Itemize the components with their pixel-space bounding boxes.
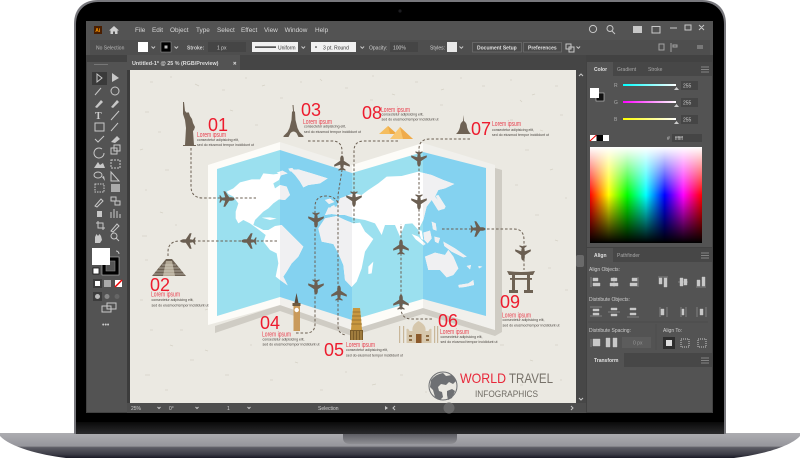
panel: color [587, 62, 712, 247]
control bar: Opacity: [369, 46, 387, 52]
03 text block: consectetur adipisicing elit, [304, 124, 346, 128]
logo: world travel infographics: INFOGRAPHICS [475, 389, 538, 399]
control bar [90, 40, 710, 55]
canvas scrollbar [576, 74, 584, 400]
09 text block: consectetur adipisicing elit, [502, 318, 544, 322]
02 text block: Lorem ipsum [151, 292, 180, 298]
panel: align [587, 248, 712, 353]
icon: eiffel tower [284, 105, 304, 137]
control bar: 3 pt. Round [323, 46, 349, 52]
menu bar [94, 25, 704, 34]
01 text block: 01 [208, 115, 228, 135]
panel: color: B [614, 117, 618, 123]
continents [227, 168, 482, 288]
08 text block: Lorem ipsum [381, 107, 410, 114]
panel: align: Pathfinder [617, 253, 640, 259]
01 text block [197, 115, 254, 147]
05 text block: consectetur adipisicing elit, [346, 348, 388, 352]
document tab: Untitled-1* @ 25 % (RGB/Preview) [132, 61, 219, 67]
status bar: 1 [227, 406, 230, 412]
06 text block [438, 311, 498, 344]
09 text block [500, 292, 560, 328]
folded world map [208, 142, 502, 336]
panel: align: Align To: [663, 328, 682, 334]
05 text block: sed do eiusmod tempor incididunt ut [346, 354, 403, 358]
logo: world travel infographics: WORLD [460, 370, 506, 386]
tools panel: T [95, 111, 102, 122]
02 text block [150, 275, 208, 308]
04 text block: sed do eiusmod tempor incididunt ut [262, 342, 320, 346]
panel: align: 0 px [633, 340, 643, 346]
panel: transform [587, 353, 712, 412]
control bar: Preferences [528, 46, 557, 52]
icon: temple stupa [456, 115, 471, 134]
06 text block: consectetur adipisicing elit, [440, 335, 482, 339]
menu bar: View [264, 27, 278, 34]
status bar: 0° [169, 406, 174, 412]
map paper frame [208, 142, 495, 330]
control bar: 1 px [217, 46, 227, 52]
map shadow [215, 168, 502, 336]
tools panel [87, 62, 127, 412]
08 text block: 08 [362, 103, 382, 123]
control bar: No Selection [96, 46, 125, 52]
panel: color: Color [594, 67, 607, 73]
01 text block: consectetur adipisicing elit, [197, 138, 239, 142]
dashed routes [168, 139, 524, 335]
05 text block [324, 340, 403, 360]
02 text block: sed do eiusmod tempor incididunt ut [152, 304, 208, 308]
panel: color: G [614, 100, 618, 106]
tools panel: ••• [102, 322, 110, 329]
08 text block [362, 103, 438, 123]
menu bar: Help [315, 27, 329, 34]
01 text block: sed do eiusmod tempor incididunt ut [197, 143, 254, 147]
menu bar: Object [170, 27, 189, 34]
panel: align: Distribute Objects: [589, 297, 630, 303]
status bar [127, 402, 586, 414]
09 text block: 09 [500, 292, 520, 312]
panel: color: Gradient [617, 67, 637, 73]
04 text block: Lorem ipsum [262, 332, 291, 338]
control bar: Document Setup [477, 46, 517, 52]
icon: mayan pyramid [152, 259, 186, 276]
panel: color: # [667, 136, 670, 142]
control bar: 100% [393, 46, 406, 52]
menu bar: File [135, 27, 146, 34]
09 text block: sed do eiusmod tempor incididunt ut [502, 324, 560, 328]
airplanes [180, 151, 531, 310]
menu bar: Effect [241, 27, 257, 34]
06 text block: sed do eiusmod tempor incididunt ut [440, 340, 498, 344]
04 text block [260, 313, 320, 346]
status bar: 25% [131, 406, 142, 412]
map water panels [217, 150, 486, 320]
menu bar: Type [196, 27, 210, 34]
icon: big ben [292, 293, 300, 331]
06 text block: Lorem ipsum [440, 329, 469, 336]
04 text block: consectetur adipisicing elit, [262, 338, 304, 342]
menu bar: Select [217, 27, 235, 34]
control bar: Stroke: [187, 46, 205, 52]
icon: taj mahal [399, 321, 438, 343]
panel: color: 255 [683, 84, 692, 90]
07 text block: sed do eiusmod tempor incididunt ut [492, 133, 549, 137]
color spectrum [590, 147, 702, 243]
03 text block: 03 [301, 100, 321, 120]
panel: align: Align Objects: [589, 267, 620, 273]
panel: align: Align [594, 253, 606, 259]
07 text block [471, 119, 549, 139]
illustrator window [86, 21, 713, 413]
02 text block: 02 [150, 275, 170, 295]
07 text block: Lorem ipsum [492, 121, 521, 128]
laptop base [0, 433, 800, 458]
panel: color: Stroke [648, 67, 663, 73]
06 text block: 06 [438, 311, 458, 331]
panel: color: 255 [683, 100, 692, 106]
09 text block: Lorem ipsum [502, 312, 531, 320]
menu bar: Window [285, 27, 308, 34]
04 text block: 04 [260, 313, 280, 333]
panel: color: R [614, 83, 618, 89]
logo: world travel infographics: TRAVEL [509, 370, 553, 386]
control bar: Styles: [430, 46, 445, 52]
control bar: Uniform [278, 46, 296, 52]
05 text block: 05 [324, 340, 344, 360]
08 text block: consectetur adipisicing elit, [382, 112, 424, 116]
artboard: paper background [130, 70, 576, 403]
icon: statue of liberty [183, 102, 196, 146]
laptop lid and bezel [74, 0, 726, 434]
08 text block: sed do eiusmod tempor incididunt ut [382, 118, 438, 122]
menu bar: Edit [152, 27, 163, 34]
07 text block: consectetur adipisicing elit, [492, 128, 534, 132]
03 text block [301, 100, 361, 134]
icon: leaning tower [350, 308, 363, 340]
panel: align: Distribute Spacing: [589, 328, 631, 334]
status bar: Selection [318, 406, 339, 412]
panel: color: ffffff [675, 136, 683, 142]
menu bar: Ai [95, 28, 101, 34]
05 text block: Lorem ipsum [346, 342, 375, 349]
document tab [127, 55, 240, 70]
icon: torii gate [507, 271, 535, 293]
panel: color: 255 [683, 118, 692, 124]
icon: orange pyramids [379, 126, 413, 139]
03 text block: Lorem ipsum [303, 119, 332, 126]
02 text block: consectetur adipisicing elit, [152, 298, 194, 302]
03 text block: sed do eiusmod tempor incididunt ut [304, 130, 361, 134]
07 text block: 07 [471, 119, 491, 139]
panel: transform: Transform [594, 358, 619, 364]
01 text block: Lorem ipsum [197, 132, 226, 139]
logo: world travel infographics [429, 370, 553, 400]
